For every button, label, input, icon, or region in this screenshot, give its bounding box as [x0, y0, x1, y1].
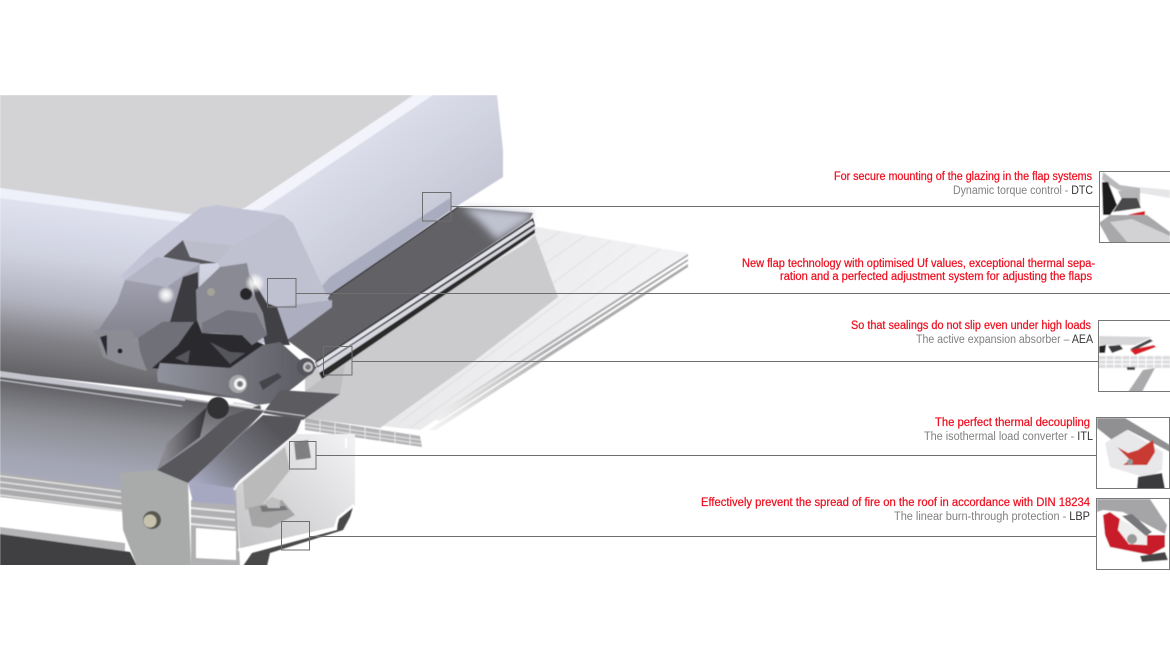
left hinge end block: [94, 330, 147, 371]
left frame profile: [0, 188, 250, 400]
notch: [163, 240, 217, 264]
right hinge plate: [196, 263, 267, 345]
text: LBP: The linear burn-through protection - LBP: [894, 511, 1090, 523]
multi-wall sheet end grid: [305, 418, 422, 447]
thumbnail: AEA detail: [1098, 320, 1170, 392]
frame guide lines: [0, 371, 262, 407]
product render: roof flap cross-section: [0, 95, 688, 566]
seal plate: [287, 207, 533, 362]
text: DTC: [834, 171, 1093, 197]
hinge housing side: [218, 215, 332, 345]
text: flap technology: New flap technology with optimised Uf values, exceptional thermal sepa-: [742, 258, 1095, 270]
text: LBP: [701, 497, 1091, 523]
white glazing strip left: [0, 188, 192, 223]
text: flap technology: ration and a perfected adjustment system for adjusting the flaps: [780, 271, 1092, 283]
text: AEA: The active expansion absorber – AEA: [916, 334, 1093, 346]
callout line 4: [290, 442, 1096, 469]
glazing panel (top): [0, 95, 414, 215]
text: DTC: For secure mounting of the glazing in the flap systems: [834, 171, 1092, 183]
text: flap technology: [742, 258, 1095, 283]
hinge interior tiles: [175, 342, 245, 364]
hinge arm: [157, 342, 317, 405]
front left hinge block: [97, 257, 200, 370]
interior of profile: [234, 428, 355, 566]
flap strip and wedge: [157, 390, 340, 483]
text: ITL: The perfect thermal decoupling: [935, 417, 1090, 429]
callout line 1: [422, 192, 1099, 221]
right frame profile: [243, 95, 503, 310]
thumbnail: ITL detail: [1096, 417, 1170, 489]
cross-section top surface: [188, 415, 302, 502]
ribbed lower rail: [0, 473, 137, 566]
lower frame surface: [0, 372, 265, 490]
text: ITL: [924, 417, 1094, 443]
callout line 2: [268, 278, 1170, 307]
text: ITL: The isothermal load converter - ITL: [924, 431, 1094, 443]
callout line 3: [324, 346, 1098, 375]
hinge housing top: [120, 205, 283, 280]
text: AEA: [851, 320, 1093, 346]
rail end ribs: [191, 482, 240, 566]
thumbnail: DTC detail: [1099, 171, 1170, 243]
text: AEA: So that sealings do not slip even under high loads: [851, 320, 1091, 332]
text: DTC: Dynamic torque control - DTC: [953, 185, 1093, 197]
EPDM seals: [315, 218, 535, 379]
glass below seal near hinge: [306, 366, 344, 394]
dark shadow behind right plate: [250, 275, 290, 345]
end plate with bolt: [120, 470, 191, 566]
dark interior of hinge: [152, 321, 265, 369]
arm bolts: [229, 358, 315, 393]
callout line 5: [282, 522, 1096, 550]
specular highlights: [157, 273, 265, 304]
translucent multi-wall glass sheet: [305, 227, 688, 430]
thumbnail: LBP detail: [1096, 498, 1170, 570]
text: LBP: Effectively prevent the spread of fire on the roof in accordance with DIN 18234: [701, 497, 1091, 509]
